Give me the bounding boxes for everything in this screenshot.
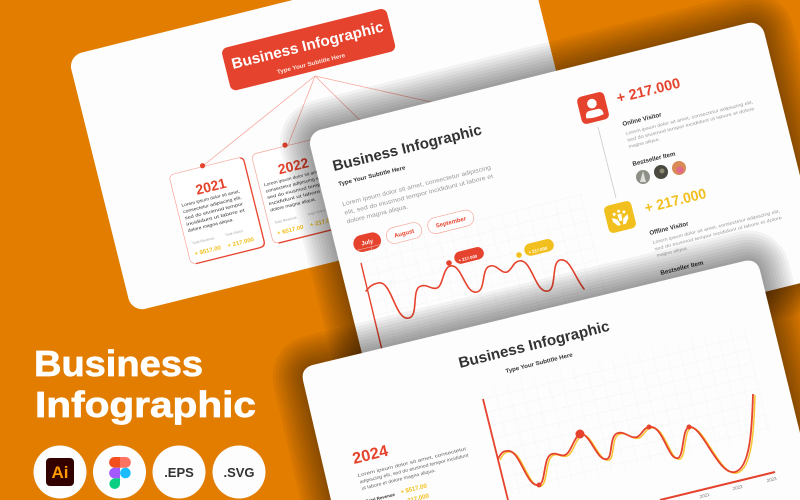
month pills: September [435,216,467,230]
card: 2022: + $517.00 [277,225,304,237]
offline visitor stats: magna aliqua. [656,245,688,258]
online visitor stats: Online Visitor [622,111,663,128]
month pills: August [394,229,415,240]
card: 2022: consectetur adipiscing elit, [265,174,324,194]
offline visitor stats: sed do eiusmod tempor incididunt ut labore et dolore [654,215,783,251]
online visitor stats: Bestseller Item [632,150,677,168]
offline visitor stats: Lorem ipsum dolor sit amet, consectetur adipiscing elit, [652,208,780,245]
line chart: 2020 to 2023: 2023 [766,476,778,483]
online visitor stats [615,76,756,168]
online visitor stats: magna aliqua. [628,136,660,149]
card: 2022: dolore magna aliqua. [270,196,317,213]
card: 2021: + 217.000 [227,237,255,249]
timeline connector [598,127,616,198]
slide background [307,20,800,390]
card: 2021: incididunt ut labore et [186,207,246,227]
title: Infographic [35,384,256,425]
slide shadow [307,20,800,390]
line chart: 2020 to 2023 [481,326,778,500]
heading and intro text [331,121,496,225]
year summary: 2024: ut labore et dolore magna aliqua. [361,468,436,491]
year summary: 2024 [351,443,470,500]
online visitor stats: sed do eiusmod tempor incididunt ut labore et dolore [627,106,756,142]
heading and intro text: Lorem ipsum dolor sit amet, consectetur adipiscing [342,165,492,208]
card: 2022: Total Revenue [274,215,297,225]
card: 2022: + 217.000 [310,216,337,229]
icon: Adobe Illustrator: Ai [52,463,68,482]
header box: Business Infographic [230,19,385,73]
card: 2022: incididunt ut labore et [268,187,329,206]
year summary: 2024: + $517.00 [400,482,428,496]
year cards and header group [142,8,435,265]
panel: bottom slide with 2024 chart [303,261,800,500]
card: 2021 [168,153,265,265]
year summary: 2024: Lorem ipsum dolor sit amet, consectetur [357,446,467,478]
icon: online visitor [576,91,610,125]
offline visitor stats: Offline Visitor [649,220,690,237]
offline visitor stats: Bestseller Item [660,259,705,277]
card: 2021: Total Visitor [225,229,244,237]
header box [221,8,396,92]
offline visitor stats [643,186,783,277]
card: 2021: + $517.00 [194,245,222,258]
panel: middle slide with line chart and visitors [307,20,800,390]
card: 2022: sed do eiusmod tempor [267,180,327,200]
heading: Type Your Subtitle Here [505,352,574,375]
line chart: July to September [358,193,610,360]
icon: Adobe Illustrator [34,446,86,498]
year summary: 2024: 2024 [351,443,390,468]
card: 2021: Total Revenue [192,236,215,245]
badge: EPS: .EPS [164,465,194,480]
line chart: July to September: + 217.000 [458,253,478,263]
badge: SVG: .SVG [223,465,255,480]
card: 2022: Lorem ipsum dolor sit amet, [263,168,323,187]
card: 2021: sed do eiusmod tempor [184,201,244,221]
card: 2021: dolore magna aliqua. [187,217,234,233]
card: 2021: Lorem ipsum dolor sit amet, [181,189,240,208]
heading and intro text: dolore magna aliqua. [346,204,409,225]
card: 2022: 2022 [276,154,310,177]
heading: Business Infographic [457,318,611,372]
bestseller thumbnails [636,161,686,184]
badge: EPS [152,446,206,498]
card: 2021: consectetur adipiscing elit, [183,195,242,214]
icon: Figma [93,446,146,498]
title [34,343,256,425]
header box: Type Your Subtitle Here [277,53,347,76]
offline visitor stats: + 217.000 [643,186,708,217]
month pills [352,207,476,254]
card: 2021: 2021 [194,175,228,198]
year summary: 2024: adipiscing elit, sed do eiusmod tempor incididunt [359,452,470,484]
heading and intro text: Type Your Subtitle Here [338,165,407,188]
title: Business [34,343,203,384]
slide shadow [303,261,800,500]
online visitor stats: Lorem ipsum dolor sit amet, consectetur adipiscing elit, [625,99,753,136]
badge: SVG [212,446,266,498]
line chart: 2020 to 2023: 2021 [699,492,711,499]
panel: top-left slide with year cards [68,0,588,312]
line chart: July to September: + 217.000 [528,245,548,255]
heading and intro text: elit, sed do eiusmod tempor incididunt ut labore et [344,174,494,217]
connector lines [204,76,440,165]
slide background [68,0,588,312]
online visitor stats: + 217.000 [615,76,682,107]
card: 2022 [250,133,348,244]
heading and intro text: Business Infographic [331,121,483,175]
icon: offline visitor [603,200,637,234]
slide background [303,261,800,500]
line chart: 2020 to 2023: 2022 [732,484,744,491]
card: 2022: Total Visitor [307,208,327,217]
month pills: July [361,239,375,248]
